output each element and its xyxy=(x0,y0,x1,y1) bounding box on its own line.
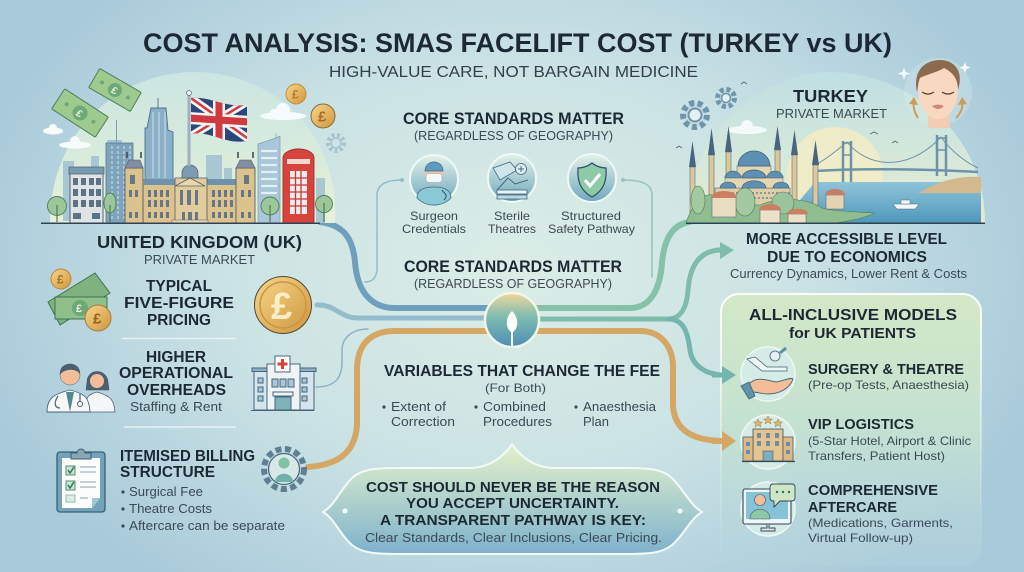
panel: core standards xyxy=(402,109,635,291)
text: VIP logistics: VIP LOGISTICS xyxy=(808,417,914,433)
labels under icons: Safety Pathway xyxy=(548,222,635,236)
trees xyxy=(48,193,332,222)
subtitle: HIGH-VALUE CARE, NOT BARGAIN MEDICINE xyxy=(329,64,698,81)
labels under icons: Sterile xyxy=(494,209,530,223)
birds xyxy=(676,82,898,148)
flag with pole xyxy=(186,90,250,166)
text: five-figure pricing xyxy=(124,278,234,329)
text: surgery and theatre: SURGERY & THEATRE xyxy=(808,362,964,378)
icon: cash and coins: £ xyxy=(57,272,64,286)
panel: Turkey scene xyxy=(676,58,985,224)
callout: transparent pathway banner: Clear Standards, Clear Inclusions, Clear Pricing. xyxy=(365,531,662,545)
panel heading: for UK PATIENTS xyxy=(789,325,916,342)
panel: variables that change the fee: Correction xyxy=(391,415,455,429)
text: more accessible level: DUE TO ECONOMICS xyxy=(767,249,927,266)
subheading: private market: PRIVATE MARKET xyxy=(144,253,255,267)
icon: central hub xyxy=(485,293,539,347)
text: five-figure pricing: TYPICAL xyxy=(146,278,212,295)
glass tower xyxy=(145,98,173,180)
arrowheads on right connectors xyxy=(712,242,736,451)
panel: United Kingdom scene xyxy=(41,68,344,224)
text: higher operational overheads: OPERATIONAL xyxy=(119,365,233,382)
pale background buildings xyxy=(63,120,325,223)
text: VIP logistics: (5-Star Hotel, Airport & Clinic xyxy=(808,434,971,448)
heading: United Kingdom: UNITED KINGDOM (UK) xyxy=(97,232,302,252)
subheading: Turkey private market: PRIVATE MARKET xyxy=(776,107,887,121)
text: higher operational overheads xyxy=(119,349,233,414)
labels under icons: Surgeon xyxy=(410,209,458,223)
trees and houses xyxy=(686,186,875,223)
text: itemised billing: Theatre Costs xyxy=(129,502,212,516)
cloud xyxy=(727,120,767,134)
ground line xyxy=(41,222,320,224)
panel: variables that change the fee: Combined xyxy=(483,400,546,414)
sun xyxy=(787,127,883,223)
palace xyxy=(125,152,255,223)
text: comprehensive aftercare: (Medications, Garments, xyxy=(808,516,953,530)
text: higher operational overheads: OVERHEADS xyxy=(127,382,226,399)
callout: transparent pathway banner: A TRANSPARENT PATHWAY IS KEY: xyxy=(380,513,646,529)
labels under icons: Structured xyxy=(561,209,621,223)
icon: safety shield xyxy=(568,154,616,202)
icon: pound coin: £ xyxy=(318,108,327,126)
text: itemised billing xyxy=(120,448,285,533)
icon: sterile theatre xyxy=(488,154,536,202)
boat xyxy=(893,200,919,209)
icon: hospital xyxy=(251,356,316,410)
heading: Turkey: TURKEY xyxy=(793,86,868,106)
icon: banknote xyxy=(52,89,108,137)
icon: large pound coin: £ xyxy=(271,286,292,328)
gears xyxy=(683,90,734,127)
labels under icons xyxy=(402,209,635,236)
dome glow xyxy=(689,72,985,223)
panel: variables that change the fee: Procedures xyxy=(483,415,552,429)
icon: cash and coins xyxy=(48,269,111,331)
text: five-figure pricing: FIVE-FIGURE xyxy=(124,295,234,312)
text: surgery and theatre: (Pre-op Tests, Anaesthesia) xyxy=(808,378,969,392)
heading: core standards matter: CORE STANDARDS MATTER xyxy=(403,109,624,128)
icon: monitor with chat xyxy=(741,482,795,536)
text: higher operational overheads: HIGHER xyxy=(146,349,206,366)
panel: variables that change the fee: Extent of xyxy=(391,400,447,414)
dome glow behind city xyxy=(50,72,335,223)
office block left xyxy=(69,167,104,223)
panel: variables that change the fee: VARIABLES THAT CHANGE THE FEE xyxy=(384,363,660,380)
icon: banknote xyxy=(89,68,141,112)
connectors: flow lines between panels and hub xyxy=(308,178,725,467)
labels under icons: Credentials xyxy=(402,222,466,236)
text: higher operational overheads: Staffing & Rent xyxy=(130,400,223,414)
blue tower xyxy=(106,143,133,223)
subheading: regardless of geography: (REGARDLESS OF GEOGRAPHY) xyxy=(414,129,613,143)
text: comprehensive aftercare: Virtual Follow-up) xyxy=(808,531,913,545)
text: VIP logistics xyxy=(808,417,971,463)
text: comprehensive aftercare: COMPREHENSIVE xyxy=(808,483,938,499)
icon: hotel xyxy=(741,415,795,469)
text: comprehensive aftercare xyxy=(808,483,953,545)
sea xyxy=(800,182,981,223)
text: more accessible level: MORE ACCESSIBLE LEVEL xyxy=(746,231,947,248)
repeated subheading: (REGARDLESS OF GEOGRAPHY) xyxy=(414,277,612,291)
icon: surgery hand xyxy=(741,347,795,401)
text: five-figure pricing: PRICING xyxy=(147,312,211,329)
icon: pound coin: £ xyxy=(292,88,299,102)
phone box xyxy=(283,149,314,223)
title: COST ANALYSIS: SMAS FACELIFT COST (TURKEY vs UK) xyxy=(143,28,892,58)
icon: banknote: £ xyxy=(74,108,85,121)
text: itemised billing: ITEMISED BILLING xyxy=(120,448,255,465)
icon: large pound coin xyxy=(254,276,312,334)
panel: variables that change the fee: (For Both) xyxy=(485,381,546,395)
callout: transparent pathway banner: COST SHOULD NEVER BE THE REASON xyxy=(366,480,660,496)
icon: doctors xyxy=(47,364,115,412)
panel heading xyxy=(749,307,957,342)
ground line xyxy=(686,222,985,224)
text: itemised billing: Aftercare can be separate xyxy=(129,519,285,533)
labels under icons: Theatres xyxy=(488,222,536,236)
right tower xyxy=(258,133,280,223)
icon: clipboard checklist xyxy=(57,449,105,512)
callout: transparent pathway banner xyxy=(323,444,702,554)
text: more accessible level: Currency Dynamics, Lower Rent & Costs xyxy=(730,267,967,281)
icon: face with lift arrows xyxy=(898,58,972,128)
text: itemised billing: STRUCTURE xyxy=(120,464,215,481)
icon: faint gear xyxy=(328,135,344,151)
panel heading: ALL-INCLUSIVE MODELS xyxy=(749,307,957,324)
text: VIP logistics: Transfers, Patient Host) xyxy=(808,449,945,463)
icon: cash and coins: £ xyxy=(93,310,102,328)
icon: gear with person xyxy=(264,449,304,489)
panel: variables that change the fee xyxy=(382,363,660,429)
far headland xyxy=(918,177,981,193)
panel: variables that change the fee: Anaesthesia xyxy=(583,400,656,414)
icon: pound coin xyxy=(286,84,306,104)
icon: banknote: £ xyxy=(109,85,120,98)
repeated heading: CORE STANDARDS MATTER xyxy=(404,257,622,276)
callout: transparent pathway banner: YOU ACCEPT UNCERTAINTY. xyxy=(406,496,619,512)
panel: all-inclusive models xyxy=(721,294,981,566)
text: surgery and theatre xyxy=(808,362,969,392)
icon: cash and coins: £ xyxy=(76,303,82,315)
text: comprehensive aftercare: AFTERCARE xyxy=(808,500,897,516)
clouds xyxy=(43,103,306,148)
text: more accessible level xyxy=(730,231,967,281)
mosque xyxy=(689,126,819,220)
icon: surgeon xyxy=(410,155,458,205)
bridge xyxy=(815,135,978,182)
text: itemised billing: Surgical Fee xyxy=(129,485,203,499)
panel: variables that change the fee: Plan xyxy=(583,415,609,429)
icon: pound coin xyxy=(311,104,335,128)
